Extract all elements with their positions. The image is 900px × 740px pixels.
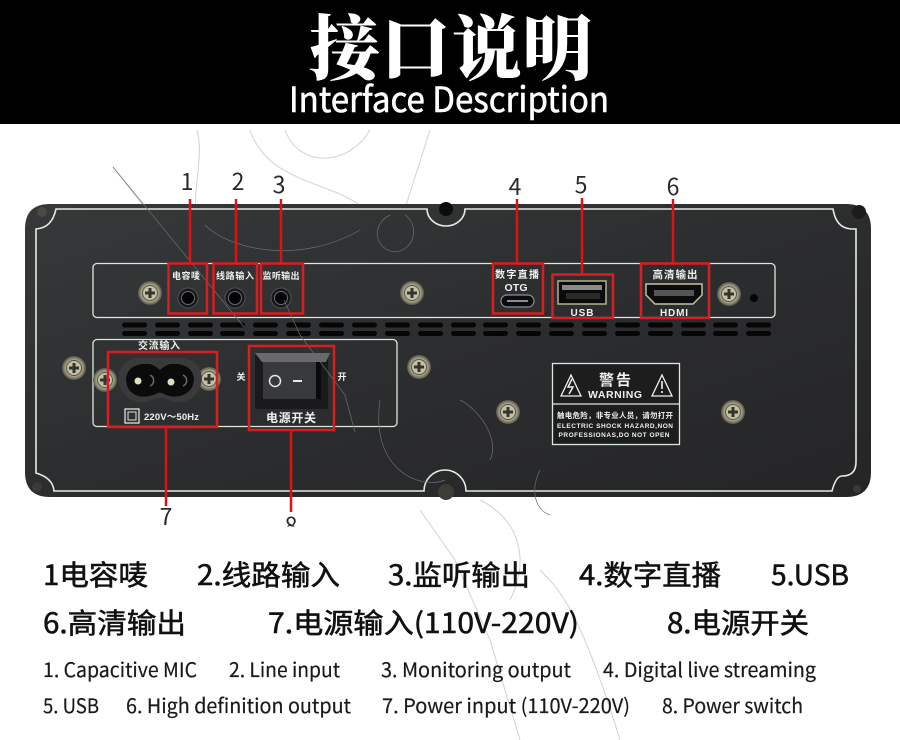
English legend row 1 bbox=[43, 654, 816, 683]
mounting holes bbox=[439, 202, 453, 216]
upper connector plate bbox=[93, 264, 775, 318]
connector: USB: USB bbox=[570, 308, 594, 319]
title: English: Interface Description bbox=[289, 72, 609, 123]
English legend row 2: 5. USB bbox=[43, 690, 99, 719]
Chinese legend row 2 bbox=[43, 602, 809, 642]
connector: OTG USB-C: OTG bbox=[504, 282, 528, 294]
English legend row 1: 2. Line input bbox=[229, 654, 340, 683]
connector: line input: 线路输入 bbox=[216, 270, 254, 281]
connector: OTG USB-C bbox=[495, 268, 539, 307]
warning label bbox=[552, 364, 680, 444]
connector: power switch: 开 bbox=[337, 372, 347, 382]
connector: monitoring output bbox=[262, 270, 300, 308]
panel screws bbox=[62, 281, 745, 424]
watermark scribbles above panel bbox=[113, 130, 620, 740]
Chinese legend row 1: 2.线路输入 bbox=[197, 554, 340, 594]
callout 8 bbox=[249, 346, 334, 541]
callout 3: 3 bbox=[273, 166, 285, 200]
connector: line input bbox=[216, 270, 254, 308]
connector: power switch bbox=[236, 353, 347, 425]
Chinese legend row 1: 3.监听输出 bbox=[388, 554, 530, 594]
connector: power inlet: 交流输入 bbox=[138, 339, 180, 352]
lower power plate bbox=[93, 340, 397, 426]
English legend row 1: 4. Digital live streaming bbox=[603, 654, 816, 683]
callout 4: 4 bbox=[509, 168, 522, 202]
ventilation slots bbox=[122, 322, 771, 336]
connector: HDMI: HDMI bbox=[660, 308, 688, 319]
watermark scribbles over panel bbox=[113, 167, 550, 515]
icon: exclamation hazard bbox=[652, 375, 672, 396]
Chinese legend row 2: 7.电源输入(110V-220V) bbox=[268, 602, 579, 642]
Chinese legend row 2: 8.电源开关 bbox=[667, 602, 809, 642]
Chinese legend row 1 bbox=[43, 554, 849, 594]
connector: power switch: 电源开关 bbox=[266, 410, 316, 425]
connector: OTG USB-C: 数字直播 bbox=[495, 268, 539, 281]
English legend row 2: 7. Power input (110V-220V) bbox=[382, 690, 630, 719]
callout 3 bbox=[261, 166, 303, 314]
connector: capacitive mic: 电容唛 bbox=[172, 270, 200, 281]
connector: HDMI bbox=[646, 268, 702, 319]
Chinese legend row 1: 5.USB bbox=[771, 554, 849, 594]
warning label: 触电危险，非专业人员，请勿打开 bbox=[557, 410, 674, 420]
Chinese legend row 1: 1电容唛 bbox=[43, 554, 148, 594]
device rear panel bbox=[25, 167, 871, 515]
English legend row 1: 1. Capacitive MIC bbox=[43, 654, 197, 683]
connector: HDMI: 高清输出 bbox=[652, 268, 698, 281]
callout 6 bbox=[641, 168, 709, 318]
warning label: PROFESSIONAS,DO NOT OPEN bbox=[558, 432, 670, 439]
English legend row 1: 3. Monitoring output bbox=[381, 654, 571, 683]
connector: monitoring output: 监听输出 bbox=[262, 270, 300, 281]
indicator hole bbox=[750, 294, 758, 302]
callout 6: 6 bbox=[667, 168, 679, 202]
connector: power inlet: 220V～50Hz bbox=[144, 412, 199, 423]
callout 2 bbox=[214, 163, 257, 314]
callout 4 bbox=[493, 168, 543, 314]
English legend row 2: 6. High definition output bbox=[126, 690, 351, 719]
panel border line bbox=[36, 209, 856, 491]
callout 1 bbox=[168, 163, 207, 314]
callout 2: 2 bbox=[232, 163, 244, 197]
connector: USB bbox=[558, 281, 606, 319]
callout 5 bbox=[552, 166, 613, 318]
connector: capacitive mic bbox=[172, 270, 200, 308]
callout 7 bbox=[108, 352, 217, 532]
English legend row 2 bbox=[43, 690, 803, 719]
warning label: 警告 bbox=[599, 371, 631, 389]
callout 1: 1 bbox=[181, 163, 193, 197]
icon: electric hazard bbox=[561, 375, 581, 396]
header banner bbox=[0, 0, 900, 124]
callout 5: 5 bbox=[575, 166, 587, 200]
Chinese legend row 2: 6.高清输出 bbox=[43, 602, 186, 642]
connector: power switch: 关 bbox=[236, 371, 246, 382]
warning label: WARNING bbox=[588, 389, 642, 401]
callout 7: 7 bbox=[160, 498, 172, 532]
callout 8: 8 bbox=[285, 507, 297, 541]
warning label: ELECTRIC SHOCK HAZARD,NON bbox=[557, 423, 673, 430]
English legend row 2: 8. Power switch bbox=[662, 690, 803, 719]
connector: power inlet bbox=[118, 339, 202, 423]
Chinese legend row 1: 4.数字直播 bbox=[579, 554, 721, 594]
